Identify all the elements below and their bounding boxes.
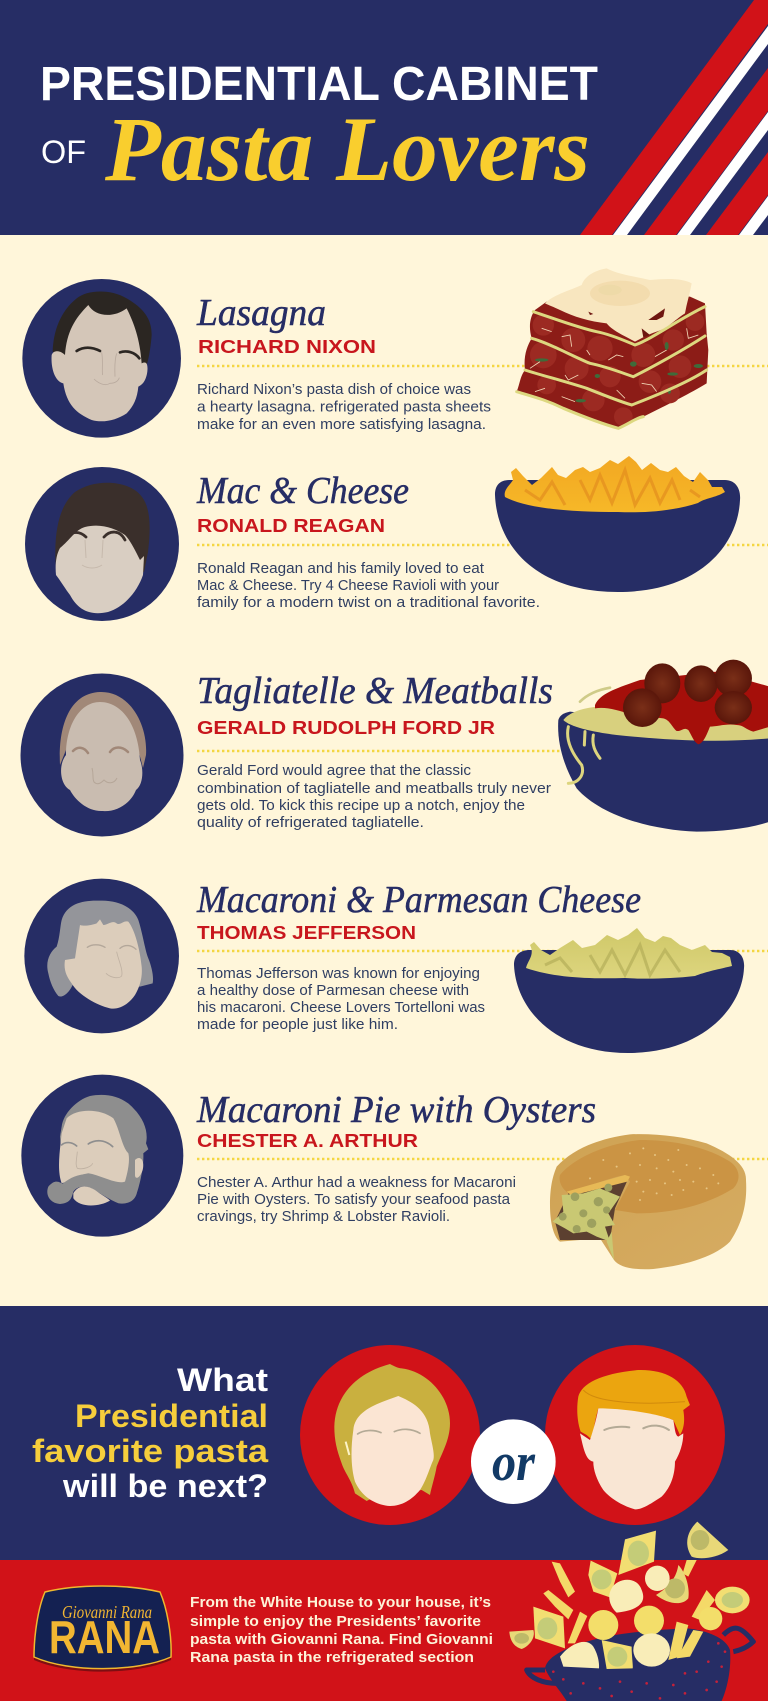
or badge bbox=[471, 1419, 556, 1504]
panel: Ford tagliatelle and meatballs bbox=[20, 660, 768, 836]
portrait: Richard Nixon bbox=[22, 279, 181, 438]
portrait: Thomas Jefferson bbox=[24, 879, 179, 1033]
description: a healthy dose of Parmesan cheese with bbox=[197, 983, 469, 999]
panel: Reagan mac and cheese bbox=[25, 456, 768, 621]
illustration: mac and cheese bowl bbox=[495, 456, 740, 592]
portrait: Gerald Ford bbox=[20, 674, 184, 836]
description: Mac & Cheese. Try 4 Cheese Ravioli with your bbox=[197, 578, 499, 594]
description: Richard Nixon’s pasta dish of choice was bbox=[197, 382, 471, 398]
description: Ronald Reagan and his family loved to eat bbox=[197, 561, 484, 577]
title script: pasta lovers: Pasta Lovers bbox=[104, 98, 590, 200]
panel: next president question bbox=[0, 1306, 768, 1560]
description: a hearty lasagna. refrigerated pasta sheets bbox=[197, 400, 491, 416]
footer message: From the White House to your house, it’s bbox=[190, 1594, 491, 1611]
diagonal stripes bbox=[580, 0, 768, 235]
dish title: Macaroni Pie with Oysters bbox=[196, 1089, 596, 1131]
president name: RICHARD NIXON bbox=[198, 336, 376, 357]
logo: Giovanni Rana: Giovanni Rana bbox=[62, 1602, 152, 1622]
president name: RONALD REAGAN bbox=[197, 515, 385, 536]
title word: of: OF bbox=[41, 134, 86, 170]
president name: GERALD RUDOLPH FORD JR bbox=[197, 717, 495, 738]
panel: Jefferson macaroni and parmesan bbox=[24, 879, 768, 1053]
description: family for a modern twist on a traditional favorite. bbox=[197, 595, 540, 611]
question text: will be next? bbox=[62, 1468, 268, 1504]
illustration: macaroni pie bbox=[550, 1134, 746, 1269]
question text bbox=[32, 1362, 268, 1504]
word: or: or bbox=[492, 1432, 536, 1492]
portrait: Hillary Clinton bbox=[300, 1345, 480, 1525]
president name: CHESTER A. ARTHUR bbox=[197, 1130, 418, 1151]
question text: Presidential bbox=[75, 1398, 268, 1434]
question text: favorite pasta bbox=[32, 1433, 268, 1469]
logo: Giovanni Rana bbox=[34, 1586, 171, 1672]
description: cravings, try Shrimp & Lobster Ravioli. bbox=[197, 1209, 450, 1225]
illustration: pot of pasta bbox=[509, 1522, 753, 1701]
description: Gerald Ford would agree that the classic bbox=[197, 763, 471, 779]
panel: Nixon lasagna bbox=[22, 268, 768, 438]
question text: What bbox=[177, 1362, 268, 1398]
description: his macaroni. Cheese Lovers Tortelloni was bbox=[197, 1000, 485, 1016]
portrait: Donald Trump bbox=[545, 1345, 725, 1525]
description: quality of refrigerated tagliatelle. bbox=[197, 815, 424, 831]
footer message: simple to enjoy the Presidents’ favorite bbox=[190, 1613, 481, 1630]
logo: Giovanni Rana: RANA bbox=[49, 1611, 160, 1663]
illustration: macaroni and parmesan bowl bbox=[514, 928, 744, 1053]
president name: THOMAS JEFFERSON bbox=[197, 922, 416, 943]
portraits: candidates and or badge bbox=[300, 1345, 725, 1525]
description: gets old. To kick this recipe up a notch, enjoy the bbox=[197, 798, 525, 814]
dish title: Mac & Cheese bbox=[196, 470, 409, 512]
portrait: Chester A. Arthur bbox=[21, 1075, 183, 1237]
footer message: Rana pasta in the refrigerated section bbox=[190, 1649, 474, 1666]
panel: footer bbox=[0, 1522, 768, 1701]
portrait: Ronald Reagan bbox=[25, 467, 179, 621]
header banner bbox=[0, 0, 768, 235]
description: Chester A. Arthur had a weakness for Macaroni bbox=[197, 1175, 516, 1191]
dish title: Lasagna bbox=[196, 292, 326, 334]
description: Thomas Jefferson was known for enjoying bbox=[197, 966, 480, 982]
dish title: Macaroni & Parmesan Cheese bbox=[196, 879, 641, 921]
description: made for people just like him. bbox=[197, 1017, 398, 1033]
dish title: Tagliatelle & Meatballs bbox=[197, 670, 553, 712]
illustration: tagliatelle and meatballs bowl bbox=[558, 660, 768, 832]
panel: Arthur macaroni pie with oysters bbox=[21, 1075, 768, 1269]
title line one: PRESIDENTIAL CABINET bbox=[40, 58, 598, 111]
description: Pie with Oysters. To satisfy your seafood pasta bbox=[197, 1192, 511, 1208]
illustration: lasagna bbox=[517, 268, 708, 428]
footer message: pasta with Giovanni Rana. Find Giovanni bbox=[190, 1631, 493, 1648]
description: make for an even more satisfying lasagna. bbox=[197, 417, 486, 433]
description: combination of tagliatelle and meatballs truly never bbox=[197, 781, 551, 797]
